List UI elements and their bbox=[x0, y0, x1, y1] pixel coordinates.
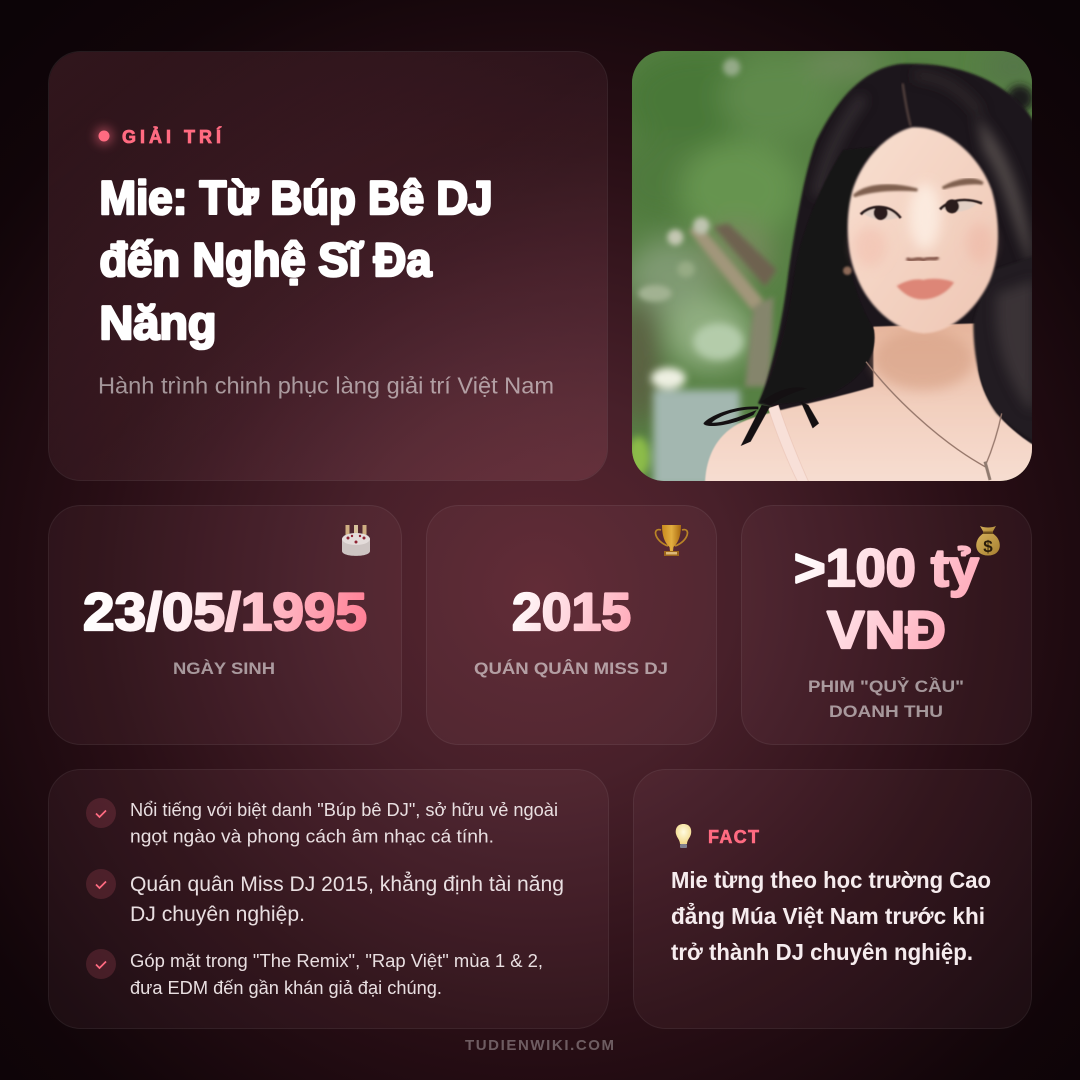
list item 3: Góp mặt trong "The Remix", "Rap Việt" mùa 1 & 2, bbox=[130, 951, 543, 971]
stat value: >100 tỷ bbox=[794, 539, 980, 598]
fact text: đẳng Múa Việt Nam trước khi bbox=[671, 901, 985, 929]
list item 1: Nổi tiếng với biệt danh "Búp bê DJ", sở hữu vẻ ngoài bbox=[130, 800, 558, 820]
list item 2 bbox=[86, 869, 564, 926]
stat value bbox=[794, 539, 980, 660]
stat label: QUÁN QUÂN MISS DJ bbox=[474, 659, 668, 678]
list item 1 bbox=[86, 798, 558, 846]
stat label: NGÀY SINH bbox=[173, 659, 275, 678]
title: Mie: Từ Búp Bê DJ bbox=[100, 171, 492, 224]
icon: birthday cake bbox=[342, 525, 370, 556]
lips bbox=[897, 279, 954, 299]
list item 3: đưa EDM đến gần khán giả đại chúng. bbox=[130, 978, 442, 998]
photo: portrait of Mie bbox=[632, 51, 1032, 481]
stat value: 23/05/1995 bbox=[83, 583, 367, 642]
stat card: box office bbox=[742, 506, 1032, 744]
eyes bbox=[861, 199, 982, 220]
title: Năng bbox=[100, 296, 216, 349]
list item 1: ngọt ngào và phong cách âm nhạc cá tính. bbox=[130, 826, 494, 846]
fact label: FACT bbox=[708, 827, 759, 847]
title bbox=[100, 171, 492, 349]
stat label: PHIM "QUỶ CẦU" bbox=[808, 677, 964, 696]
footer source: TUDIENWIKI.COM bbox=[465, 1037, 614, 1054]
category tag: GIẢI TRÍ bbox=[122, 126, 222, 147]
earring bbox=[843, 266, 852, 275]
fact text bbox=[671, 867, 991, 965]
eyebrows bbox=[854, 186, 917, 196]
panel: fact card bbox=[634, 770, 1032, 1028]
fact text: trở thành DJ chuyên nghiệp. bbox=[671, 939, 973, 965]
left hair over shoulder bbox=[758, 147, 877, 404]
icon: money bag: $ bbox=[983, 537, 993, 556]
title: đến Nghệ Sĩ Đa bbox=[100, 233, 432, 286]
list item 2: DJ chuyên nghiệp. bbox=[130, 903, 305, 926]
stat value: VNĐ bbox=[827, 601, 946, 660]
black ribbon bbox=[704, 402, 820, 446]
subtitle: Hành trình chinh phục làng giải trí Việt Nam bbox=[98, 372, 554, 398]
list item 2: Quán quân Miss DJ 2015, khẳng định tài năng bbox=[130, 872, 564, 896]
panel: highlights list bbox=[48, 770, 608, 1028]
hair highlights bbox=[812, 72, 1032, 259]
necklace bbox=[866, 362, 1002, 467]
icon: light bulb bbox=[676, 824, 691, 848]
hair part bbox=[903, 83, 911, 126]
pink strap bbox=[768, 405, 809, 483]
icon: trophy bbox=[656, 525, 687, 556]
stat label bbox=[808, 677, 964, 721]
hair silhouette bbox=[758, 64, 1043, 470]
stat card: birth date bbox=[48, 506, 402, 744]
panel: hero title card bbox=[48, 52, 608, 480]
fact text: Mie từng theo học trường Cao bbox=[671, 867, 991, 893]
chest and shoulder bbox=[705, 323, 1043, 487]
face bbox=[848, 127, 998, 333]
right hair beside neck bbox=[972, 258, 1032, 427]
nose bbox=[907, 257, 938, 260]
stat value: 2015 bbox=[512, 583, 631, 642]
list item 3 bbox=[86, 949, 543, 998]
icon: money bag bbox=[976, 526, 1000, 556]
stat card: Miss DJ bbox=[426, 506, 716, 744]
stat label: DOANH THU bbox=[829, 702, 943, 721]
background trunk and bokeh bbox=[638, 59, 777, 387]
